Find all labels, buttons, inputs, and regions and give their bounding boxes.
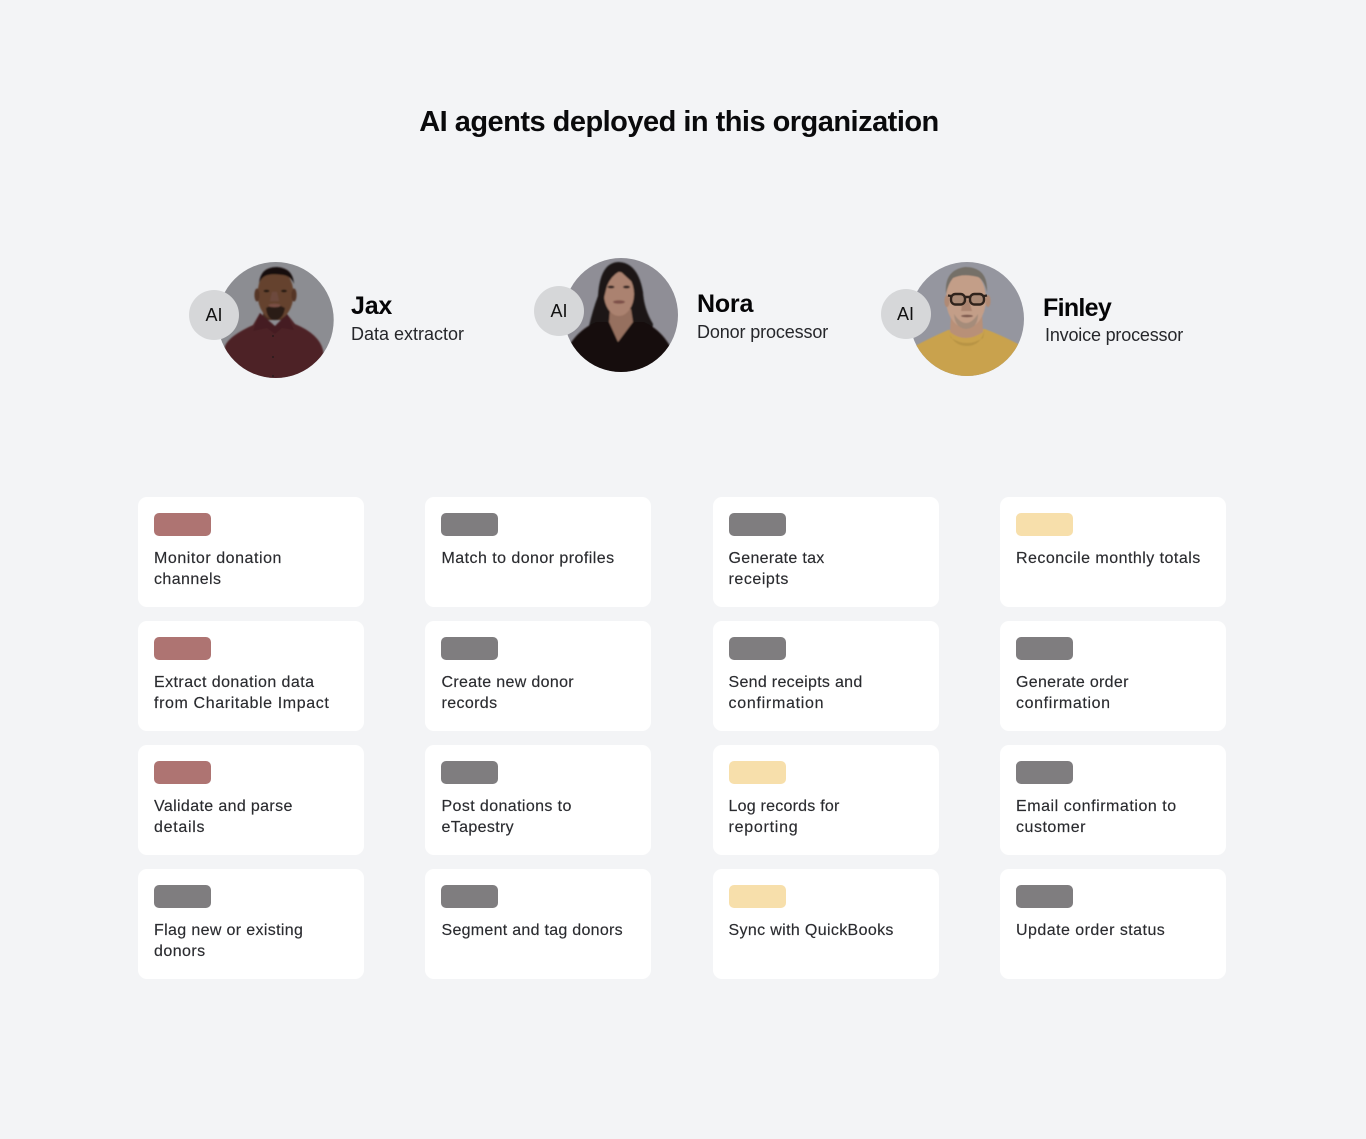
- portrait: Jax: [221, 262, 334, 378]
- card: Generate tax receipts: [712, 497, 938, 607]
- card: Sync with QuickBooks: Sync with QuickBooks: [728, 922, 894, 939]
- panel: task column 4: [1000, 497, 1226, 979]
- AI badge: AI: [897, 304, 914, 324]
- title: AI agents deployed in this organization: [419, 106, 939, 138]
- card: Email confirmation to customer: customer: [1016, 819, 1086, 836]
- card: Flag new or existing donors: donors: [154, 943, 206, 960]
- card: Segment and tag donors: Segment and tag donors: [442, 922, 623, 939]
- card: Send receipts and confirmation: confirmation: [728, 695, 824, 712]
- card: Post donations to eTapestry: Post donations to: [442, 798, 572, 815]
- card: Monitor donation channels: channels: [154, 571, 221, 588]
- card: Validate and parse details: [138, 745, 364, 855]
- card: Segment and tag donors: [425, 869, 651, 979]
- card: Send receipts and confirmation: [712, 621, 938, 731]
- card: Update order status: Update order status: [1016, 922, 1165, 939]
- card: Send receipts and confirmation: Send receipts and: [728, 674, 863, 691]
- card: Post donations to eTapestry: [425, 745, 651, 855]
- panel: task column 1: [138, 497, 364, 979]
- card: Email confirmation to customer: Email confirmation to: [1016, 798, 1177, 815]
- role: Donor processor: [697, 322, 828, 342]
- AI badge: AI: [550, 301, 568, 321]
- card: Extract donation data: Extract donation data: [154, 674, 314, 691]
- card: Sync with QuickBooks: [712, 869, 938, 979]
- card: Log records for reporting: Log records for: [728, 798, 840, 815]
- agent: Jax: [189, 262, 464, 378]
- card: Generate tax receipts: Generate tax: [728, 550, 825, 567]
- name: Finley: [1043, 294, 1111, 322]
- card: Reconcile monthly totals: [1000, 497, 1226, 607]
- card: Monitor donation channels: Monitor donation: [154, 550, 282, 567]
- agent: Nora: [534, 258, 828, 372]
- card: Update order status: [1000, 869, 1226, 979]
- card: Validate and parse details: Validate and parse: [154, 798, 293, 815]
- card: Reconcile monthly totals: Reconcile monthly totals: [1016, 550, 1201, 567]
- panel: task column 2: [425, 497, 651, 979]
- role: Invoice processor: [1045, 325, 1183, 345]
- card: Monitor donation channels: [138, 497, 364, 607]
- card: Extract donation data: from Charitable Impact: [154, 695, 329, 712]
- AI badge: [189, 290, 239, 340]
- card: Create new donor records: Create new donor: [442, 674, 574, 691]
- AI badge: [880, 289, 930, 339]
- card: Extract donation data: [138, 621, 364, 731]
- card: Post donations to eTapestry: eTapestry: [442, 819, 514, 836]
- portrait: Finley: [913, 262, 1024, 376]
- card: Create new donor records: [425, 621, 651, 731]
- card: Log records for reporting: reporting: [728, 819, 798, 836]
- card: Match to donor profiles: Match to donor profiles: [442, 550, 615, 567]
- agent: Finley: [881, 262, 1183, 376]
- AI badge: [534, 286, 584, 336]
- card: Create new donor records: records: [442, 695, 497, 712]
- card: Generate tax receipts: receipts: [728, 571, 789, 588]
- name: Jax: [351, 292, 392, 320]
- AI badge: AI: [205, 305, 222, 325]
- card: Flag new or existing donors: [138, 869, 364, 979]
- card: Validate and parse details: details: [154, 819, 205, 836]
- card: Flag new or existing donors: Flag new or existing: [154, 922, 303, 939]
- portrait: Nora: [568, 258, 678, 372]
- card: Email confirmation to customer: [1000, 745, 1226, 855]
- panel: task column 3: [713, 497, 939, 979]
- card: Generate order confirmation: confirmation: [1016, 695, 1111, 712]
- role: Data extractor: [351, 324, 464, 344]
- name: Nora: [697, 290, 753, 318]
- card: Generate order confirmation: Generate order: [1016, 674, 1129, 691]
- card: Match to donor profiles: [425, 497, 651, 607]
- card: Generate order confirmation: [1000, 621, 1226, 731]
- card: Log records for reporting: [712, 745, 938, 855]
